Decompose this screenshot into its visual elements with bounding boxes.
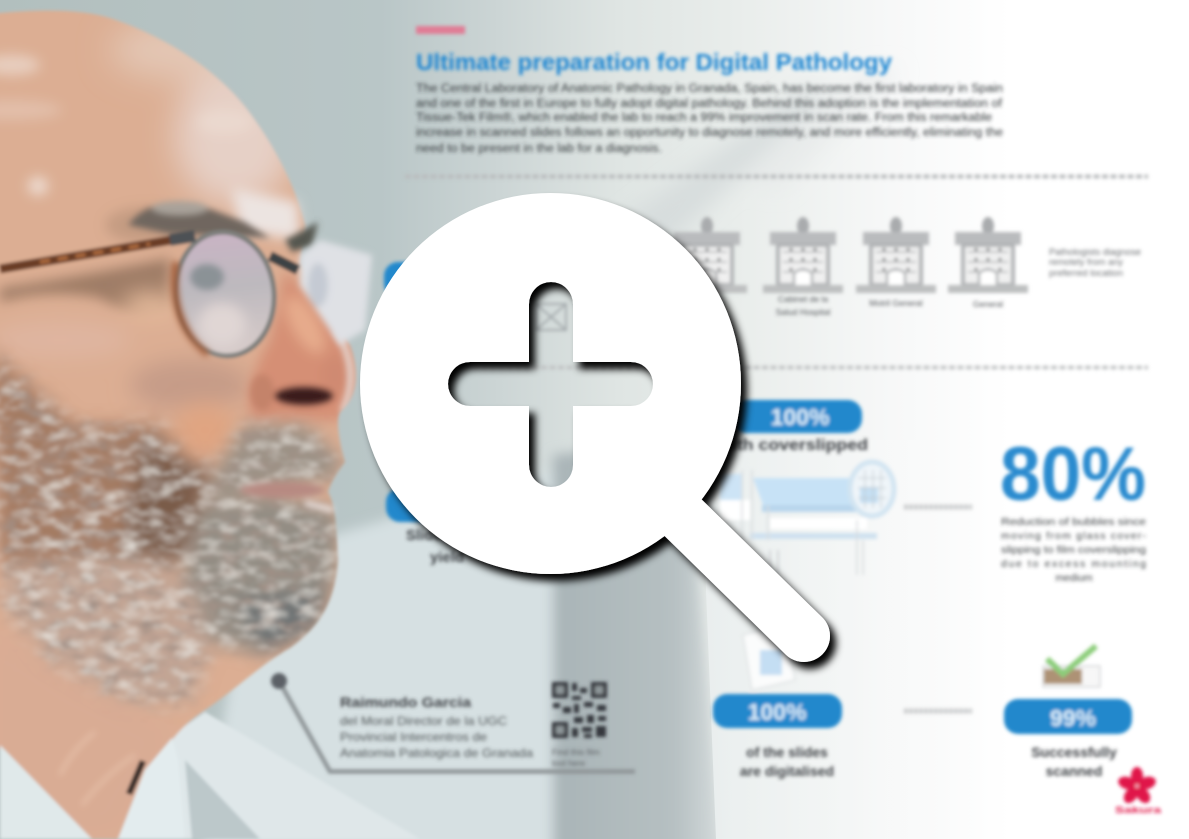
title: Ultimate preparation for Digital Pathology [416,49,892,75]
stat: 100% digitalised [713,694,842,779]
QR caption: tool here [552,758,585,768]
infographic content [271,26,1163,815]
left shirt collar [0,745,92,839]
remote diagnosis note [1049,247,1141,278]
description of 80% stat: slipping to film coverslipping [1001,544,1146,556]
intro paragraph: need to be present in the lab for a diagnosis. [416,143,662,155]
stat: 99% scanned: Successfully [1031,744,1117,760]
background diagonal streaks [610,70,900,260]
stat: 100% coverslipped: with coverslipped [717,437,868,454]
connector bottom [904,708,972,714]
description of 80% stat: due to excess mounting [1001,558,1146,570]
stat: 100% coverslipped: 100% [771,404,829,430]
remote diagnosis note: preferred location [1049,268,1123,278]
stat: 100% coverslipped [717,400,868,454]
description of 80% stat: moving from glass cover- [1001,530,1146,542]
hospital labels: Cabinet de la [778,294,828,304]
description of 80% stat: medium [1055,572,1093,584]
man's portrait [0,0,420,839]
glasses bridge [170,236,298,270]
remote diagnosis note: remotely from any [1049,257,1124,267]
icon: digitalised slide [743,625,795,690]
intro paragraph: and one of the first in Europe to fully adopt digital pathology. Behind this adoption is the implementation of [416,98,1003,110]
icon: magnifying glass with plus [360,193,804,636]
small icon behind magnifier [536,304,566,330]
glasses temple [0,240,172,269]
stat: 99% scanned: 99% [1050,705,1096,731]
icon: hospital 3 [856,217,936,293]
hospital labels: General [973,299,1003,309]
description of 80% stat [1001,516,1146,584]
right shirt collar [118,738,185,839]
logo [1115,767,1163,815]
head and neck [0,0,370,839]
stat: 100% digitalised: are digitalised [740,763,834,779]
icon: hospital 2 [763,217,843,293]
stat: 99% scanned: scanned [1046,763,1102,779]
stat: 99% scanned [1004,699,1132,779]
eyebrow white tuft [232,188,300,240]
background lower wall [200,440,722,839]
beard and stubble [0,350,345,705]
skin base [0,0,370,839]
QR code [552,682,607,738]
cheek light [0,293,250,411]
icon: check mark on slide [1043,646,1100,687]
intro paragraph: Tissue-Tek Film®, which enabled the lab to reach a 99% improvement in scan rate. From this remarkable [416,112,992,124]
QR caption: Find this film [552,747,600,757]
stat: 100% digitalised: of the slides [746,744,828,760]
lips [240,482,333,510]
hospital icons row [667,217,1028,293]
nose edge glow [335,330,351,412]
person role: Anatomia Patologica de Granada [340,746,533,760]
intro paragraph: increase in scanned slides follows an opportunity to diagnose remotely, and more efficiently, eliminating the [416,127,1003,139]
icon: hospital 4 [948,217,1028,293]
stat pill left top [384,262,514,298]
neck creases [60,732,135,805]
middle divider [405,366,1148,369]
top divider [405,174,1148,178]
description of 80% stat: Reduction of bubbles since [1001,516,1146,528]
nose shading [249,270,362,420]
nose underside [250,374,274,410]
icon: hospital 1 [667,217,747,293]
person role: Provincial Intercentros de [340,730,487,744]
callout line from portrait [271,673,635,772]
hospital labels [776,294,1003,317]
hospital labels: Salud Hospital [776,307,831,317]
stat pill left middle: Slides per [406,527,478,544]
QR caption [552,747,600,768]
stat pill left middle: yield [430,549,464,566]
stat: 80%: 80% [1000,432,1146,517]
stat pill left middle [386,488,516,566]
eye socket shadow [0,207,185,310]
stat: 100% digitalised: 100% [748,699,806,725]
connector top [904,504,972,510]
glasses lens [170,227,280,361]
background lower right fade [700,440,950,839]
person name: Raimundo Garcia [340,694,471,710]
logo: Sakura [1115,805,1163,815]
intro paragraph: The Central Laboratory of Anatomic Pathology in Granada, Spain, has become the first laboratory in Spain [416,83,1003,95]
far lens of glasses [300,240,372,345]
eyebrow [128,201,318,252]
white jacket [172,712,420,839]
illustration: coverslipped slide under lens [720,462,894,575]
intro paragraph [416,83,1003,155]
forehead light patches [110,20,295,205]
person role [340,714,533,760]
lower skin [178,402,232,454]
person role: del Moral Director de la UGC [340,714,507,728]
remote diagnosis note: Pathologists diagnose [1049,247,1141,257]
hospital labels: Motril General [869,298,923,308]
nostril [275,387,333,405]
accent bar [416,26,465,34]
